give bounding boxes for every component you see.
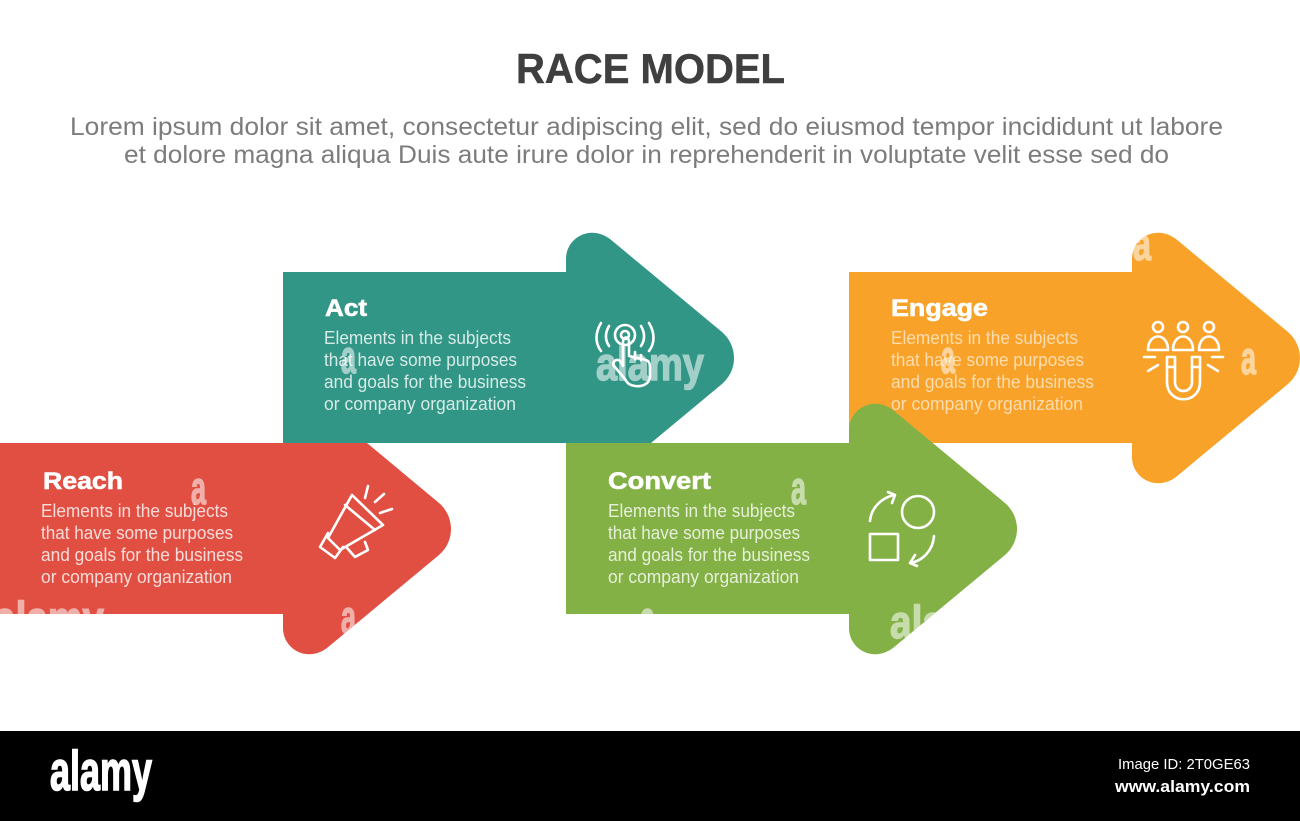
convert body text: or company organization bbox=[608, 567, 799, 587]
convert body text: Elements in the subjects bbox=[608, 501, 795, 521]
panel: convert arrow bbox=[566, 404, 1017, 654]
footer logo: alamy bbox=[50, 739, 152, 802]
convert watermark: a bbox=[791, 462, 806, 514]
reach body text: Elements in the subjects bbox=[41, 501, 228, 521]
convert watermark: a bbox=[640, 592, 655, 644]
panel: engage arrow bbox=[849, 218, 1300, 483]
engage watermark: a bbox=[1133, 218, 1151, 270]
icon: megaphone bbox=[320, 486, 392, 558]
reach body text: that have some purposes bbox=[41, 523, 233, 543]
engage heading: Engage bbox=[891, 295, 988, 322]
reach heading: Reach bbox=[43, 468, 123, 495]
engage body text: that have some purposes bbox=[891, 350, 1084, 370]
act watermark bbox=[341, 331, 704, 390]
reach body text: and goals for the business bbox=[41, 545, 243, 565]
footer bar bbox=[0, 731, 1300, 821]
act body text: that have some purposes bbox=[324, 350, 517, 370]
icon: magnet attracting people bbox=[1144, 322, 1223, 399]
engage watermark: a bbox=[1241, 332, 1256, 384]
engage body text: Elements in the subjects bbox=[891, 328, 1078, 348]
panel: reach arrow bbox=[0, 443, 451, 654]
footer website: www.alamy.com bbox=[1114, 777, 1250, 796]
reach watermark bbox=[0, 478, 355, 634]
reach body text: or company organization bbox=[41, 567, 232, 587]
convert body text: that have some purposes bbox=[608, 523, 800, 543]
act watermark: a bbox=[341, 331, 356, 383]
engage body text: and goals for the business bbox=[891, 372, 1094, 392]
engage watermark bbox=[941, 236, 1257, 376]
subtitle text bbox=[70, 113, 1223, 169]
title: RACE MODEL bbox=[516, 45, 785, 92]
act body text bbox=[324, 328, 526, 414]
icon: conversion cycle bbox=[870, 492, 934, 566]
reach watermark: a bbox=[341, 591, 356, 643]
engage body text bbox=[891, 328, 1094, 414]
act body text: or company organization bbox=[324, 394, 516, 414]
engage watermark: a bbox=[941, 331, 955, 383]
act watermark: alamy bbox=[596, 338, 704, 390]
act arrow shape bbox=[283, 233, 734, 443]
convert body text: and goals for the business bbox=[608, 545, 810, 565]
act body text: and goals for the business bbox=[324, 372, 526, 392]
panel: act arrow bbox=[283, 233, 734, 443]
engage body text: or company organization bbox=[891, 394, 1083, 414]
convert body text bbox=[608, 501, 810, 587]
convert watermark bbox=[641, 478, 936, 640]
convert watermark: alamy bbox=[890, 596, 1000, 648]
reach arrow shape bbox=[0, 443, 451, 654]
convert heading: Convert bbox=[608, 468, 711, 495]
subtitle text: et dolore magna aliqua Duis aute irure dolor in reprehenderit in voluptate velit esse sed do bbox=[124, 141, 1169, 169]
icon: tapping hand bbox=[596, 323, 654, 386]
subtitle text: Lorem ipsum dolor sit amet, consectetur adipiscing elit, sed do eiusmod tempor incididunt ut labore bbox=[70, 113, 1223, 141]
reach watermark: a bbox=[191, 462, 206, 514]
reach body text bbox=[41, 501, 243, 587]
act heading: Act bbox=[325, 295, 367, 322]
footer image id: Image ID: 2T0GE63 bbox=[1118, 756, 1250, 773]
act body text: Elements in the subjects bbox=[324, 328, 511, 348]
engage arrow shape bbox=[849, 233, 1300, 483]
convert arrow shape bbox=[566, 404, 1017, 654]
